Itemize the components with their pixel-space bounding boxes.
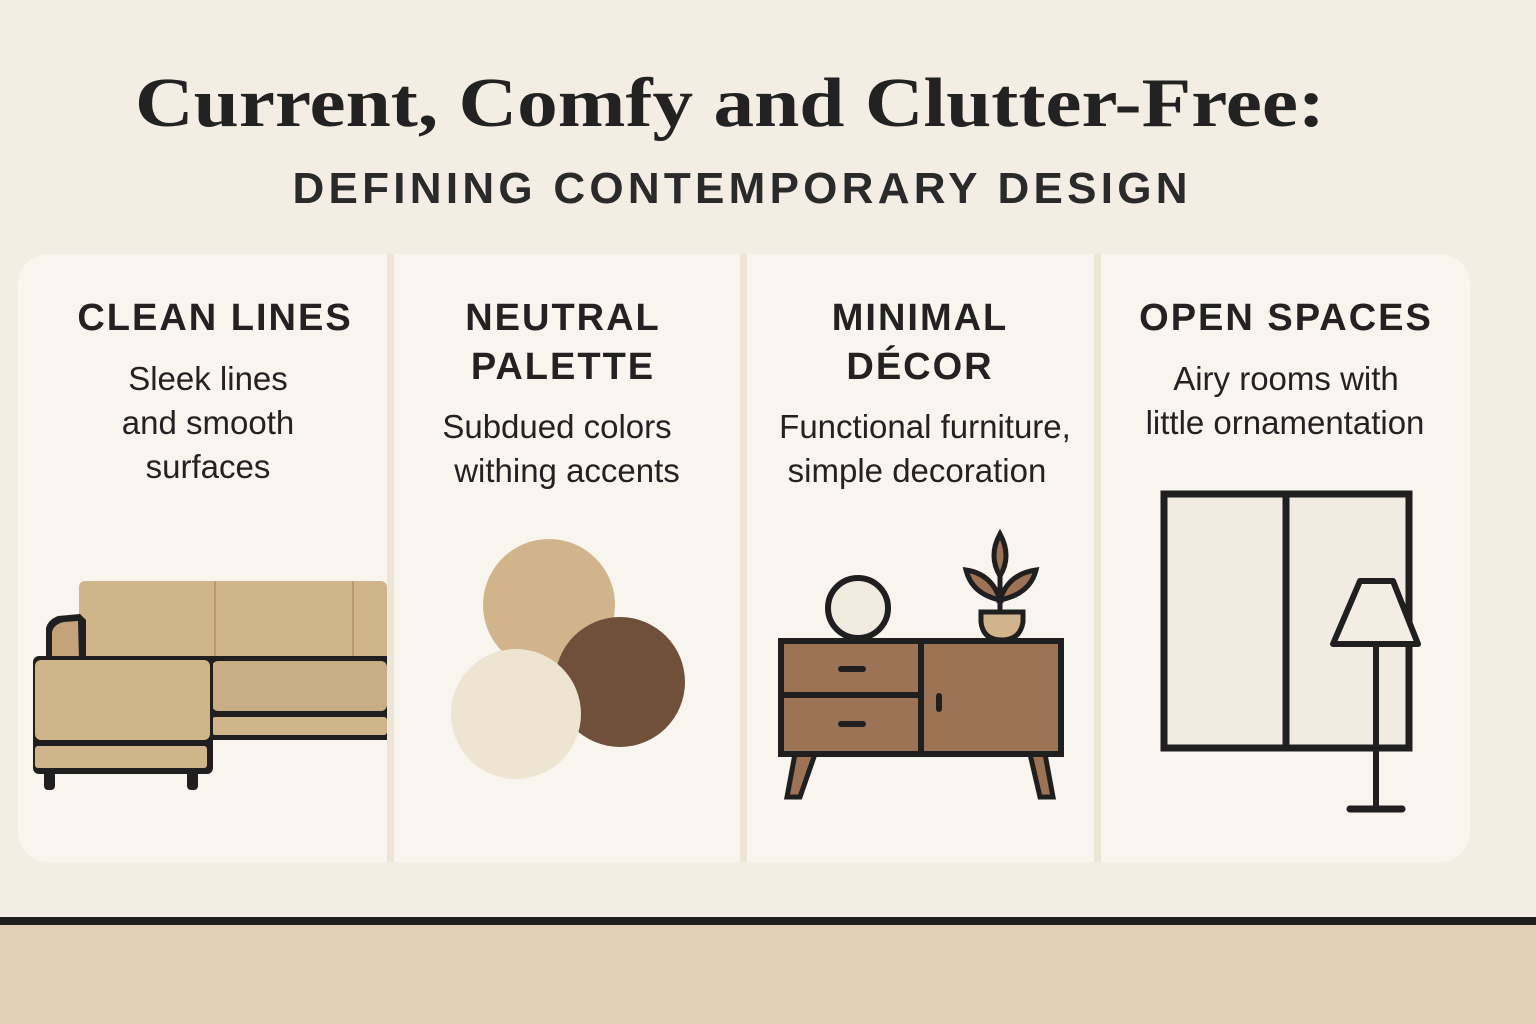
text: neutral palette: Subdued colors bbox=[442, 408, 672, 445]
heading: open spaces: OPEN SPACES bbox=[1139, 297, 1433, 339]
title: Current, Comfy and Clutter-Free: bbox=[135, 65, 1325, 142]
heading: minimal decor: DÉCOR bbox=[846, 344, 994, 388]
heading: minimal decor: MINIMAL bbox=[832, 297, 1008, 339]
text: open spaces: little ornamentation bbox=[1146, 404, 1424, 441]
heading: clean lines: CLEAN LINES bbox=[77, 297, 353, 339]
panel: neutral palette bbox=[442, 297, 685, 779]
text: minimal decor: Functional furniture, bbox=[779, 408, 1071, 445]
panels container bbox=[18, 254, 1470, 862]
text: neutral palette: withing accents bbox=[453, 452, 680, 489]
icon: sofa bbox=[33, 581, 387, 790]
icon: sideboard bbox=[781, 534, 1061, 797]
heading: neutral palette: NEUTRAL bbox=[465, 297, 661, 339]
text: clean lines: surfaces bbox=[146, 448, 270, 485]
heading: neutral palette: PALETTE bbox=[471, 346, 655, 388]
subtitle: DEFINING CONTEMPORARY DESIGN bbox=[292, 164, 1188, 213]
icon: color swatches bbox=[451, 539, 685, 779]
icon: window and lamp bbox=[1164, 494, 1418, 809]
floor bbox=[0, 917, 1536, 1024]
panel: open spaces bbox=[1139, 297, 1433, 809]
text: clean lines: and smooth bbox=[122, 404, 294, 441]
text: open spaces: Airy rooms with bbox=[1173, 360, 1399, 397]
text: clean lines: Sleek lines bbox=[128, 360, 288, 397]
text: minimal decor: simple decoration bbox=[788, 452, 1046, 489]
panel: clean lines bbox=[33, 297, 387, 790]
panel: minimal decor bbox=[779, 297, 1071, 797]
